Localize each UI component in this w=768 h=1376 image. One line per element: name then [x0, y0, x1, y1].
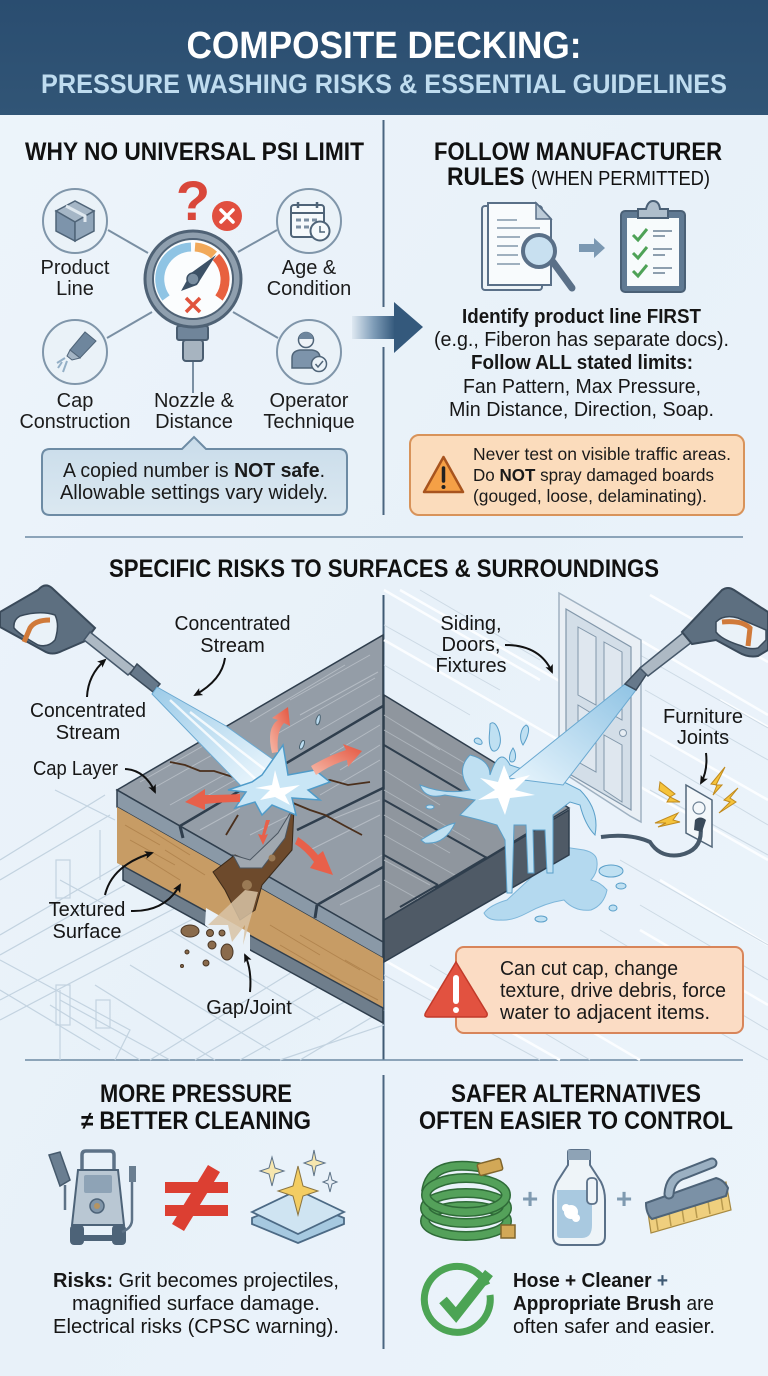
subheading: RULES (WHEN PERMITTED)	[447, 163, 710, 191]
text block: safer alternatives	[513, 1270, 715, 1338]
icon: garden hose	[425, 1158, 515, 1238]
panel: more pressure not better cleaning	[49, 1080, 344, 1338]
icon: document with magnifier	[482, 203, 572, 290]
label: siding doors fixtures: Siding,	[440, 613, 502, 635]
text block: product line instructions: Min Distance, Direction, Soap.	[449, 399, 714, 421]
text block: product line instructions: Fan Pattern, Max Pressure,	[463, 376, 701, 398]
icon: pressure gauge	[145, 231, 241, 361]
icon: cap nozzle	[43, 320, 107, 384]
label: nozzle and distance: Distance	[155, 411, 233, 433]
text block: risks: Electrical risks (CPSC warning).	[53, 1316, 339, 1338]
label: concentrated stream left: Stream	[56, 722, 120, 744]
text block: product line instructions	[434, 306, 729, 421]
panel: safer alternatives	[419, 1080, 733, 1338]
text block: risks	[53, 1270, 339, 1338]
icon: green check	[424, 1266, 490, 1332]
label: age and condition: Age &	[282, 257, 337, 279]
icon: not equal sign	[165, 1165, 228, 1231]
header banner	[0, 0, 768, 115]
callout: risk summary: texture, drive debris, force	[500, 980, 726, 1002]
icon: red x badge	[212, 201, 242, 231]
label: textured surface: Surface	[53, 921, 121, 943]
label: siding doors fixtures: Doors,	[442, 634, 500, 656]
callout: risk summary: Can cut cap, change	[500, 958, 678, 980]
callout: risk summary	[425, 947, 743, 1033]
heading: WHY NO UNIVERSAL PSI LIMIT	[25, 138, 364, 166]
panel: why no universal PSI limit	[20, 138, 364, 515]
subheading: ≠ BETTER CLEANING	[81, 1107, 311, 1135]
icon: operator	[277, 320, 341, 384]
heading: FOLLOW MANUFACTURER	[434, 138, 722, 166]
arrow: to manufacturer rules	[352, 302, 423, 353]
plus sign: +	[522, 1183, 538, 1214]
subtitle: PRESSURE WASHING RISKS & ESSENTIAL GUIDELINES	[41, 69, 727, 99]
callout: warning: Never test on visible traffic areas.	[473, 444, 731, 464]
icon: scrub brush	[646, 1163, 731, 1233]
label: furniture joints: Furniture	[663, 706, 743, 728]
text block: product line instructions: (e.g., Fiberon has separate docs).	[434, 329, 729, 351]
callout: warning	[410, 435, 744, 515]
callout: copied number	[42, 437, 347, 515]
label: product line: Product	[41, 257, 110, 279]
icon: product box	[43, 189, 107, 253]
callout: copied number: A copied number is NOT safe.	[63, 460, 325, 482]
heading: MORE PRESSURE	[100, 1080, 292, 1108]
icon: sparkling clean tile	[252, 1150, 344, 1243]
label: gap joint: Gap/Joint	[206, 997, 292, 1019]
text block: product line instructions: Follow ALL stated limits:	[471, 352, 693, 374]
heading: SAFER ALTERNATIVES	[451, 1080, 701, 1108]
icon: small arrow	[579, 238, 605, 258]
label: furniture joints: Joints	[677, 727, 729, 749]
label: operator technique: Technique	[263, 411, 355, 433]
label: product line: Line	[56, 278, 94, 300]
icon: clipboard checklist	[621, 201, 685, 292]
door	[559, 593, 641, 822]
plus sign: +	[616, 1183, 632, 1214]
label: siding doors fixtures: Fixtures	[435, 655, 507, 677]
text block: safer alternatives: Hose + Cleaner +	[513, 1270, 668, 1292]
label: age and condition: Condition	[267, 278, 351, 300]
callout: warning: (gouged, loose, delaminating).	[473, 486, 707, 506]
text block: safer alternatives: often safer and easier.	[513, 1316, 715, 1338]
label: concentrated stream top: Stream	[200, 635, 265, 657]
label: cap construction: Construction	[20, 411, 130, 433]
callout: warning: Do NOT spray damaged boards	[473, 465, 714, 485]
label: textured surface: Textured	[49, 899, 125, 921]
text block: product line instructions: Identify product line FIRST	[462, 306, 701, 328]
text block: risks: Risks: Grit becomes projectiles,	[53, 1270, 339, 1292]
panel: follow manufacturer rules	[410, 138, 744, 515]
label: cap construction: Cap	[57, 390, 93, 412]
icon: question mark: ?	[176, 169, 210, 232]
callout: risk summary: water to adjacent items.	[499, 1002, 710, 1024]
title: COMPOSITE DECKING:	[186, 25, 582, 67]
icon: pressure washer	[49, 1151, 136, 1245]
label: operator technique: Operator	[270, 390, 349, 412]
text block: risks: magnified surface damage.	[72, 1293, 320, 1315]
heading: specific risks: SPECIFIC RISKS TO SURFACES & SURROUNDINGS	[109, 555, 659, 583]
icon: calendar and clock	[277, 189, 341, 253]
label: nozzle and distance: Nozzle &	[154, 390, 235, 412]
illustration: water on surroundings	[384, 588, 768, 1060]
puddle	[484, 847, 607, 920]
illustration: damaged deck board	[0, 585, 384, 1060]
text block: safer alternatives: Appropriate Brush are	[513, 1293, 714, 1315]
icon: cleaner bottle	[553, 1150, 605, 1245]
subheading: OFTEN EASIER TO CONTROL	[419, 1107, 733, 1135]
label: concentrated stream left: Concentrated	[30, 700, 146, 722]
label: cap layer: Cap Layer	[33, 758, 118, 780]
callout: copied number: Allowable settings vary widely.	[60, 482, 328, 504]
label: concentrated stream top: Concentrated	[174, 613, 290, 635]
